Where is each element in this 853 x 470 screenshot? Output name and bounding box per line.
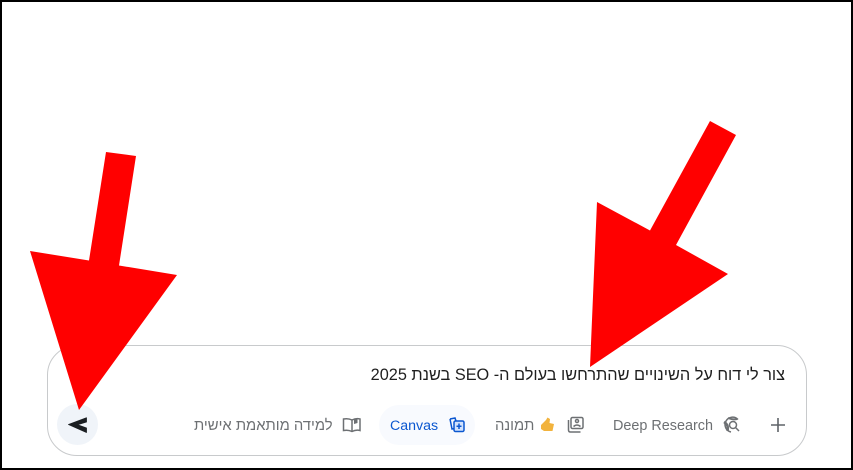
icon: send: [68, 418, 86, 432]
prompt input box: [47, 345, 807, 456]
arrow: right red arrow: [590, 121, 736, 367]
label: deep research: Deep Research: [613, 418, 713, 434]
icon: deep research globe: [724, 417, 739, 432]
send button background: [57, 404, 98, 445]
icon: plus: [771, 418, 785, 432]
icon: image stack: [568, 418, 583, 432]
arrow: left red arrow: [30, 152, 177, 410]
label: image: תמונה: [495, 418, 534, 434]
prompt text: צור לי דוח על השינויים שהתרחשו בעולם ה- SEO בשנת 2025: [371, 366, 785, 384]
icon: book: [344, 418, 360, 432]
label: personalized learning: למידה מותאמת אישית: [194, 418, 333, 434]
icon: canvas: [450, 418, 464, 432]
label: canvas: Canvas: [390, 418, 438, 434]
icon: thumbs up: [541, 418, 554, 431]
canvas button background: [379, 405, 475, 445]
